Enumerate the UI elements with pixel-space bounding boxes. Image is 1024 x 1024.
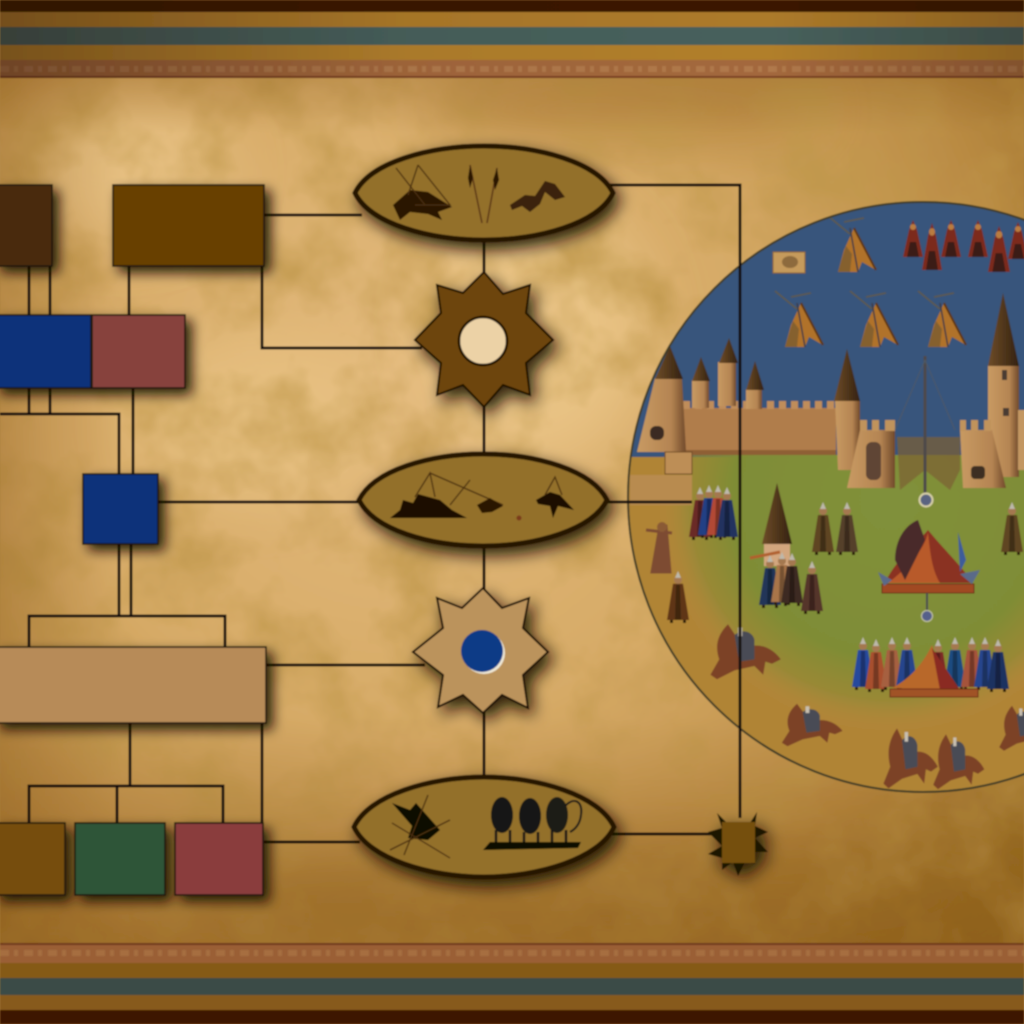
top ornamental border xyxy=(0,0,1024,78)
scene base: parchment ground xyxy=(620,450,1024,800)
circular scene: castle and armies xyxy=(620,195,1024,800)
icon: crossed spears xyxy=(468,165,499,223)
lone figures left xyxy=(646,522,689,623)
box: dark brown top left xyxy=(0,185,52,266)
right tall tower xyxy=(988,293,1019,477)
red pavilion xyxy=(878,520,980,622)
box: red bottom xyxy=(175,823,263,895)
horsemen xyxy=(710,624,1024,789)
banner xyxy=(773,252,805,273)
green field xyxy=(678,454,1024,712)
scene circle outline xyxy=(628,202,1024,792)
figure group: blue and red xyxy=(689,485,738,540)
small cone tower with figures xyxy=(750,483,823,614)
left tower xyxy=(630,346,692,505)
icon: catapult right xyxy=(516,477,574,520)
box: tan wide xyxy=(0,647,266,723)
oval 1: catapult, spears and rubble xyxy=(355,146,613,240)
icon: rubble xyxy=(510,181,565,212)
bottom ornamental border xyxy=(0,943,1024,1024)
box: brown bottom xyxy=(0,823,65,895)
lower army and tent xyxy=(852,637,1009,697)
icon: crossed weapons xyxy=(390,795,450,858)
front left tower xyxy=(847,420,895,488)
star 1: brown with hole xyxy=(415,272,553,407)
box: blue wide xyxy=(0,315,91,388)
far right tower xyxy=(1018,410,1024,470)
connector lines xyxy=(0,185,740,842)
icon: siege engine xyxy=(390,473,503,518)
icon: catapult xyxy=(393,165,452,220)
central pole xyxy=(895,356,960,506)
standing pairs xyxy=(812,502,1023,555)
box: brown top xyxy=(113,185,264,266)
centre tower xyxy=(834,349,860,470)
icon: three horses xyxy=(483,797,581,850)
curtain wall xyxy=(683,401,836,455)
sky xyxy=(620,195,1024,457)
front right tower xyxy=(960,420,1006,488)
box: green bottom xyxy=(75,823,165,895)
star 2: tan with blue circle xyxy=(413,588,548,713)
small towers xyxy=(692,338,764,409)
box: blue square xyxy=(83,474,158,544)
red figures row xyxy=(903,220,1024,272)
sky tents xyxy=(775,216,966,347)
box: red xyxy=(92,315,185,388)
oval 3: weapons and horses xyxy=(354,777,614,877)
castle xyxy=(630,293,1024,505)
small spiked square node xyxy=(708,812,768,876)
process boxes xyxy=(0,185,266,895)
oval 2: siege engines xyxy=(359,454,607,546)
